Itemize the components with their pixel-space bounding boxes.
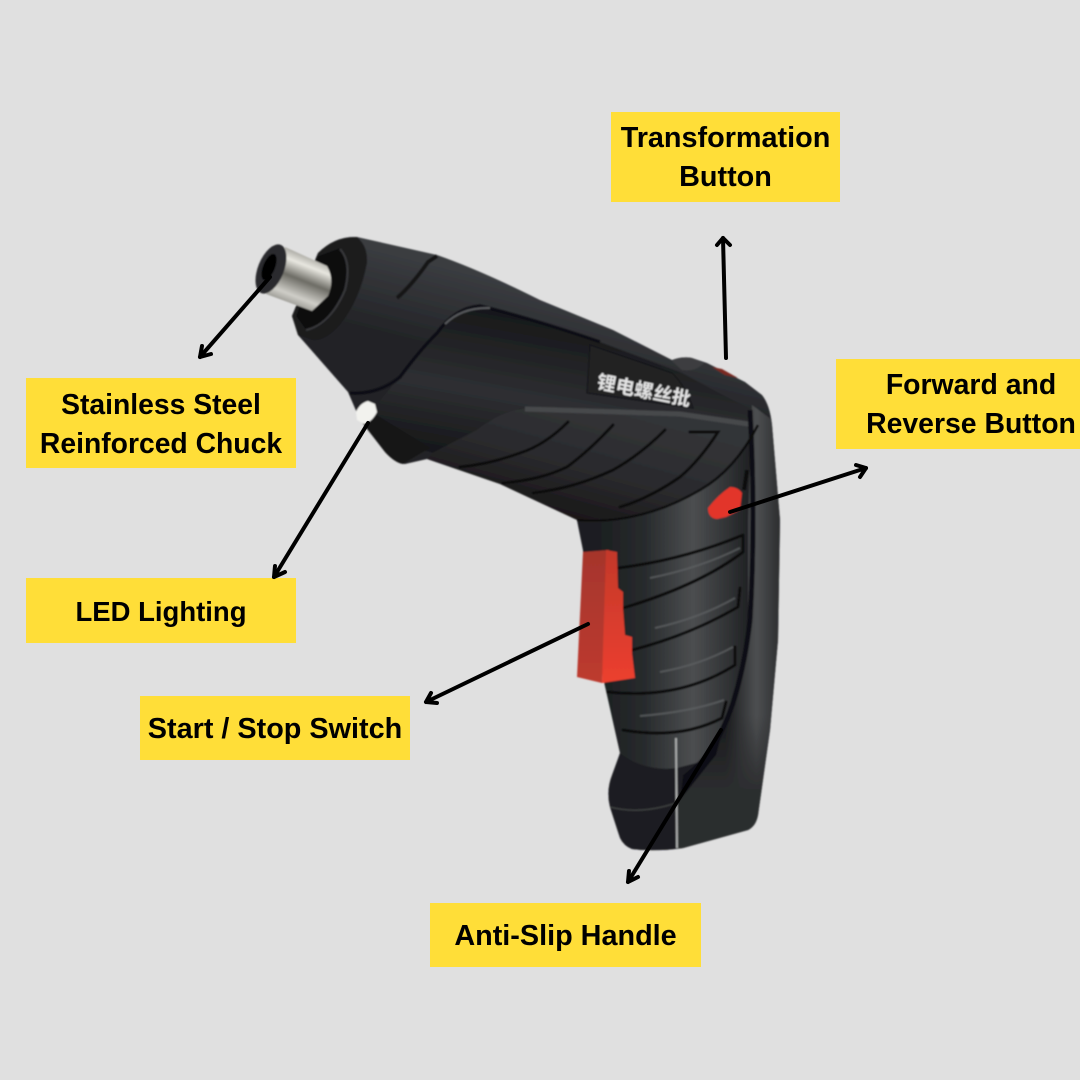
- grip ribs: [608, 535, 743, 733]
- base seam: [676, 738, 677, 848]
- LED light: [356, 401, 377, 424]
- arrow: start stop switch: [426, 624, 588, 703]
- nameplate text: 锂电螺丝批: [595, 371, 693, 411]
- label: Stainless Steel Reinforced Chuck: [26, 378, 296, 468]
- top button: [672, 357, 704, 370]
- label: Transformation Button: Button: [679, 161, 772, 193]
- body shading: [372, 306, 785, 850]
- nameplate: [587, 345, 693, 408]
- body silhouette: [292, 237, 780, 850]
- grip rib highlights: [640, 548, 740, 716]
- chuck face: [249, 240, 293, 298]
- lower strap: [678, 726, 768, 848]
- label: Forward and Reverse Button: Forward and: [886, 369, 1056, 401]
- label: Start / Stop Switch: Start / Stop Switch: [148, 712, 402, 744]
- label: Forward and Reverse Button: [836, 359, 1080, 449]
- LED housing: [362, 412, 430, 464]
- label: Anti-Slip Handle: Anti-Slip Handle: [454, 920, 677, 952]
- shoulder seam: [397, 256, 437, 298]
- arrow: anti-slip handle: [628, 730, 721, 882]
- direction button: [708, 487, 742, 519]
- arrow: chuck: [200, 277, 270, 357]
- trigger: [577, 550, 635, 683]
- label: Transformation Button: [611, 112, 840, 202]
- steel chuck: [266, 247, 331, 311]
- back strap: [677, 405, 782, 850]
- label: Forward and Reverse Button: Reverse Button: [866, 408, 1076, 440]
- barrel ribs: [460, 422, 718, 507]
- grip: [576, 448, 751, 770]
- arrow: forward and reverse button: [730, 465, 866, 512]
- sleeve seam: [350, 306, 600, 393]
- label: Anti-Slip Handle: [430, 903, 701, 967]
- label: LED Lighting: LED Lighting: [75, 596, 247, 627]
- label: Start / Stop Switch: [140, 696, 410, 760]
- label: LED Lighting: [26, 578, 296, 643]
- ribbed barrel: [427, 408, 760, 521]
- barrel lower seam: [577, 425, 758, 521]
- direction button slot: [744, 470, 747, 490]
- collar: [292, 237, 367, 340]
- arrow: LED: [274, 423, 368, 577]
- label: Stainless Steel Reinforced Chuck: Reinforced Chuck: [40, 427, 282, 459]
- strap seam: [719, 410, 756, 740]
- label: Stainless Steel Reinforced Chuck: Stainless Steel: [61, 388, 261, 420]
- upper sleeve: [372, 306, 752, 453]
- illustration: cordless screwdriver: [254, 236, 781, 852]
- transformation button: [712, 367, 738, 378]
- arrow: transformation button: [717, 238, 730, 358]
- label: Transformation Button: Transformation: [621, 122, 830, 154]
- base: [605, 753, 700, 850]
